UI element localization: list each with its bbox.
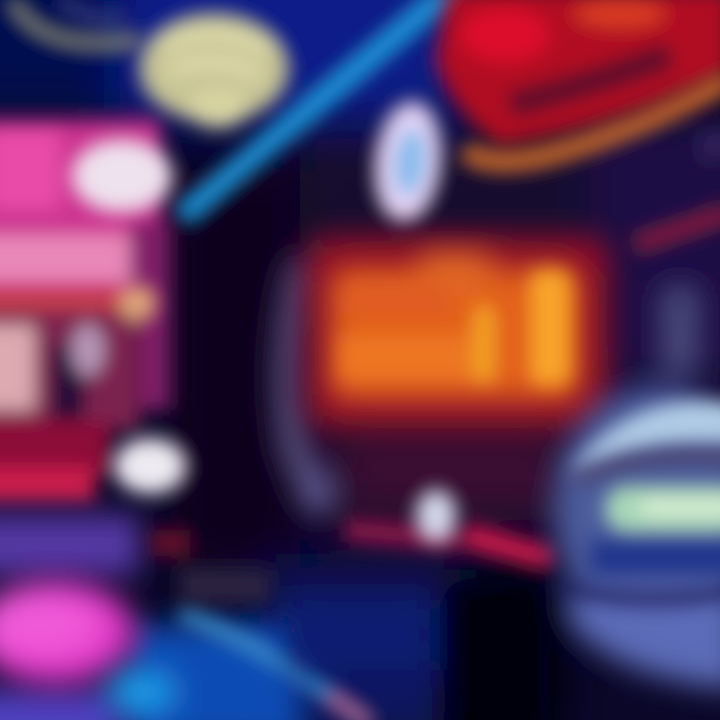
left shop counter bbox=[0, 285, 156, 502]
floor pink glow bbox=[0, 580, 135, 684]
ceiling ring top left bbox=[12, 0, 140, 43]
left floor bbox=[0, 515, 300, 720]
ceiling lamp bbox=[140, 14, 288, 128]
pink left panel bbox=[0, 120, 170, 410]
sign red frame bbox=[305, 235, 610, 430]
orange glowing sign bbox=[330, 252, 580, 400]
oval light bbox=[370, 99, 446, 225]
white glow left bbox=[114, 438, 186, 494]
red ceiling sign bbox=[436, 0, 720, 145]
right wall red stripes bbox=[635, 140, 720, 245]
floor glow bbox=[106, 668, 178, 716]
dark foreground bbox=[290, 580, 550, 720]
robot green light band bbox=[605, 486, 720, 532]
robot dark band bbox=[555, 456, 720, 599]
orange sign edge bbox=[465, 80, 720, 162]
white glow centre bbox=[416, 490, 456, 542]
floor blue streak bbox=[180, 612, 370, 720]
robot dome highlight bbox=[575, 401, 720, 574]
white dome lamp left bbox=[72, 140, 172, 212]
robot dome right bbox=[553, 285, 720, 690]
orange sign highlights bbox=[340, 270, 570, 385]
grey pillar bbox=[289, 260, 336, 516]
counter strip bbox=[150, 530, 552, 604]
diagonal blue neon beam bbox=[172, 0, 468, 224]
